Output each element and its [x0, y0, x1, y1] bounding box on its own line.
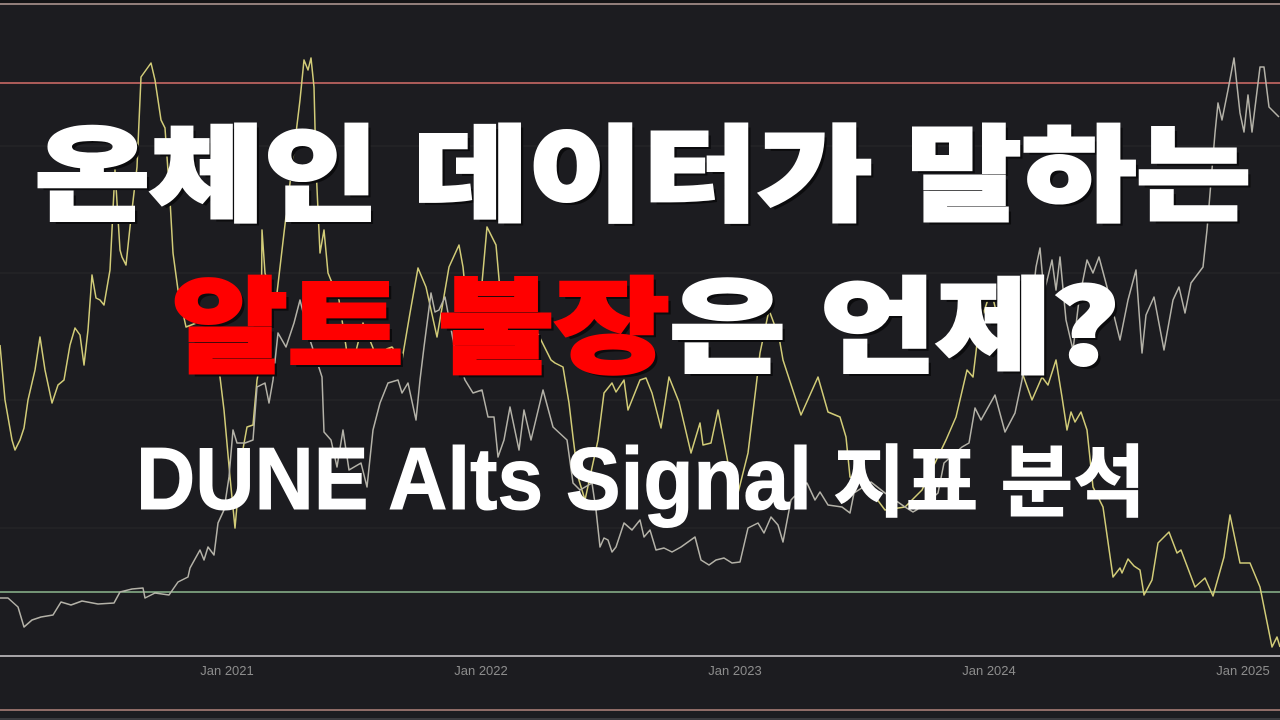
x axis labels: [200, 663, 1270, 678]
x axis labels: Jan 2021: [200, 663, 254, 678]
upper threshold red line: [0, 82, 1280, 84]
subtitle: 지표 분석: [833, 418, 1146, 533]
x axis labels: Jan 2022: [454, 663, 508, 678]
x axis labels: Jan 2024: [962, 663, 1016, 678]
chart frame top line: [0, 3, 1280, 5]
title line 2 with red highlight: 알트 불장은 언제?: [172, 244, 1119, 394]
chart frame bottom line: [0, 709, 1280, 711]
grey price series: [0, 58, 1279, 627]
subtitle: DUNE Alts Signal: [136, 429, 812, 528]
x axis labels: Jan 2023: [708, 663, 762, 678]
lower threshold green line: [0, 591, 1280, 593]
x axis labels: Jan 2025: [1216, 663, 1270, 678]
title line 1: 온체인 데이터가 말하는: [35, 92, 1251, 243]
x axis line: [0, 655, 1280, 657]
